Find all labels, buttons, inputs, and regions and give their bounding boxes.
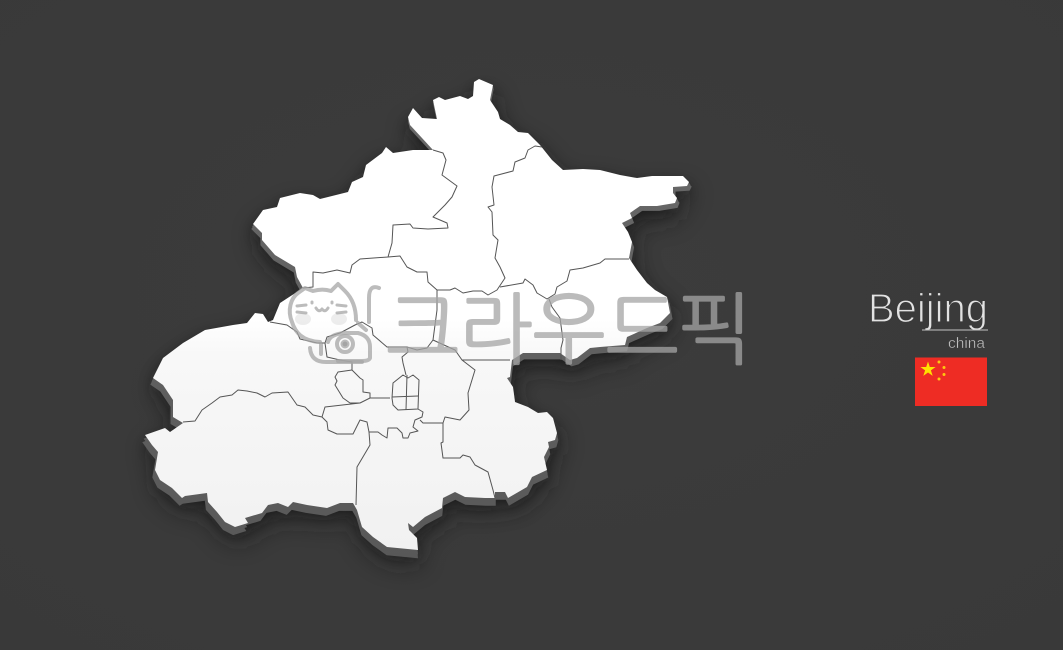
logo tail [369, 287, 379, 322]
icon: flag of China [915, 358, 987, 406]
cat cheeks [295, 313, 347, 325]
camera strap [310, 323, 366, 362]
map top surface [145, 79, 689, 550]
cat face [297, 302, 346, 313]
cat head [290, 284, 356, 342]
watermark: cat and camera logo [290, 284, 379, 362]
camera [328, 333, 370, 361]
title underline [922, 330, 988, 331]
district boundaries [183, 146, 629, 505]
flag small stars [938, 360, 946, 380]
watermark text: 크라우드픽 [386, 291, 752, 369]
title: Beijing: Beijing [868, 285, 988, 331]
flag large star [920, 362, 936, 376]
map: Beijing districts, 3D extruded [142, 79, 692, 564]
map shadow [145, 88, 691, 564]
map extruded side [142, 81, 692, 558]
subtitle: china: china [948, 335, 986, 352]
